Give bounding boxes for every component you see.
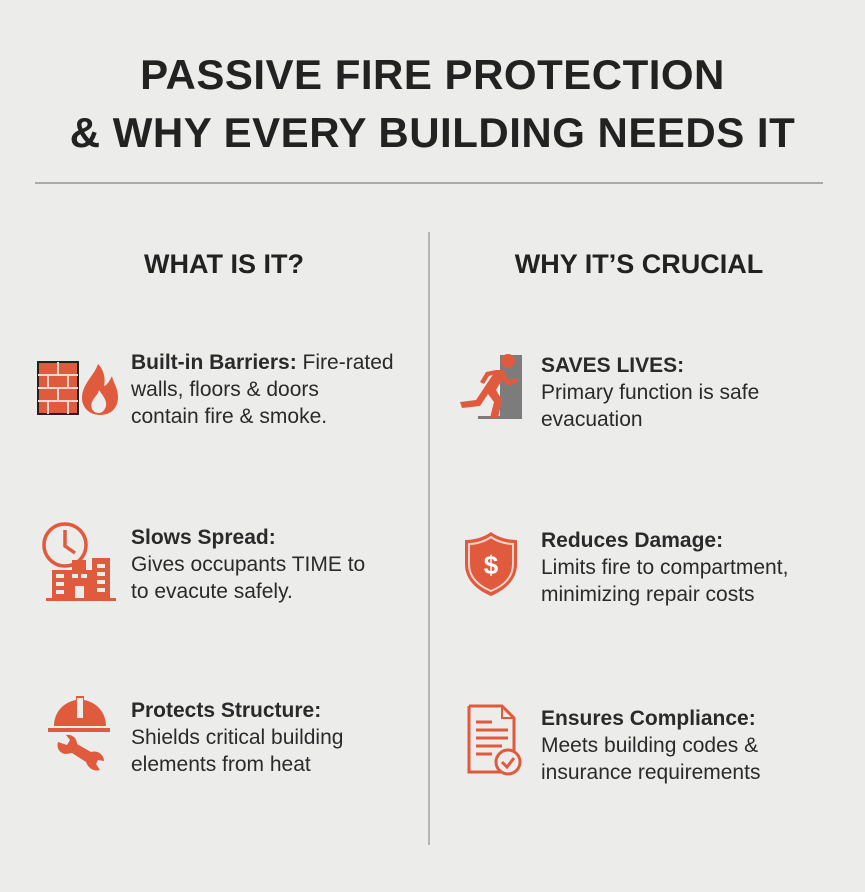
icon: hard hat and wrench	[48, 696, 110, 770]
text: built-in barriers	[131, 351, 394, 428]
text: reduces damage	[541, 529, 788, 606]
heading: why it's crucial: WHY IT’S CRUCIAL	[515, 249, 763, 279]
text: reduces damage: minimizing repair costs	[541, 583, 755, 606]
text: slows spread: to evacute safely.	[131, 580, 293, 603]
icon: brick wall and flame	[37, 361, 118, 415]
text: ensures compliance	[541, 707, 760, 784]
text: built-in barriers: contain fire & smoke.	[131, 405, 327, 428]
text: protects structure: Protects Structure:	[131, 699, 321, 722]
text: slows spread: Gives occupants TIME to	[131, 553, 365, 576]
text: built-in barriers: walls, floors & doors	[131, 378, 319, 401]
text: reduces damage: Limits fire to compartment,	[541, 556, 788, 579]
text: reduces damage: Reduces Damage:	[541, 529, 723, 552]
text: protects structure: elements from heat	[131, 753, 311, 776]
title	[70, 51, 795, 156]
text: built-in barriers: Built-in Barriers: Fire-rated	[131, 351, 394, 374]
text: ensures compliance: Ensures Compliance:	[541, 707, 756, 730]
text: protects structure	[131, 699, 343, 776]
text: saves lives: Primary function is safe	[541, 381, 759, 404]
title: PASSIVE FIRE PROTECTION	[140, 51, 725, 98]
text: protects structure: Shields critical building	[131, 726, 343, 749]
text: saves lives: SAVES LIVES:	[541, 354, 684, 377]
icon: shield with dollar	[465, 532, 517, 596]
text: slows spread: Slows Spread:	[131, 526, 276, 549]
icon: clock and building	[42, 522, 116, 601]
text: slows spread	[131, 526, 365, 603]
icon: running person exit	[460, 354, 522, 419]
heading: what is it: WHAT IS IT?	[144, 249, 304, 279]
text: ensures compliance: Meets building codes &	[541, 734, 758, 757]
icon: document with check	[468, 704, 522, 776]
text: saves lives	[541, 354, 759, 431]
text: saves lives: evacuation	[541, 408, 643, 431]
text: ensures compliance: insurance requirements	[541, 761, 760, 784]
title: & WHY EVERY BUILDING NEEDS IT	[70, 109, 795, 156]
icon: shield with dollar: $	[484, 550, 499, 580]
